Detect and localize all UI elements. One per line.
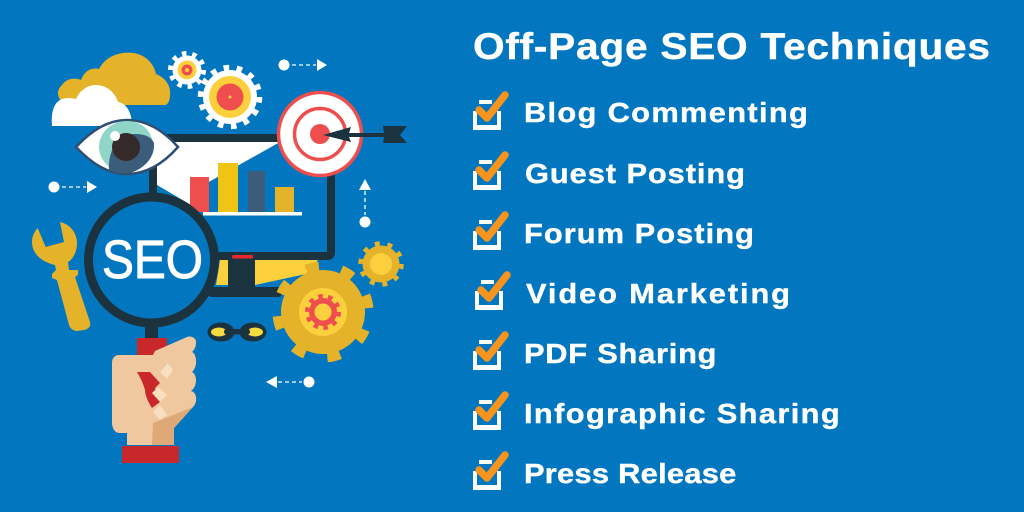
icon: large gold gear xyxy=(263,252,383,372)
arrow: up dashed xyxy=(359,179,371,228)
icon: eye xyxy=(76,120,178,174)
title: Off-Page SEO Techniques xyxy=(473,27,990,68)
icon: small gold gear xyxy=(360,244,402,284)
checklist item: Infographic Sharing: Infographic Sharing xyxy=(524,398,840,430)
icon: chain link xyxy=(208,322,266,342)
monitor screen and frame xyxy=(153,138,331,258)
checklist item: Press Release: Press Release xyxy=(524,458,736,490)
arrow: lower left dashed xyxy=(266,376,314,388)
icon: target xyxy=(278,92,362,176)
bar chart xyxy=(190,163,302,216)
magnifier label: SEO: SEO xyxy=(102,230,203,290)
icon: white cloud xyxy=(52,85,132,126)
checklist item: PDF Sharing: PDF Sharing xyxy=(524,338,717,370)
checklist item: Forum Posting: Forum Posting xyxy=(524,218,754,250)
arrow: top right dashed xyxy=(278,59,327,71)
icon: large gear xyxy=(201,68,259,126)
monitor stand xyxy=(208,260,318,297)
icon: hand xyxy=(112,336,196,445)
icon: wrench xyxy=(32,222,90,331)
icon: magnifying glass xyxy=(88,197,214,356)
icon: small gear xyxy=(170,54,204,86)
checklist item: Video Marketing: Video Marketing xyxy=(526,278,790,310)
icon: dart arrow xyxy=(323,126,407,143)
icon: gold cloud xyxy=(58,53,170,105)
hand cuff xyxy=(122,446,179,463)
checklist item: Guest Posting: Guest Posting xyxy=(525,158,745,190)
arrow: left dashed xyxy=(48,181,97,193)
checklist item: Blog Commenting: Blog Commenting xyxy=(524,97,808,129)
